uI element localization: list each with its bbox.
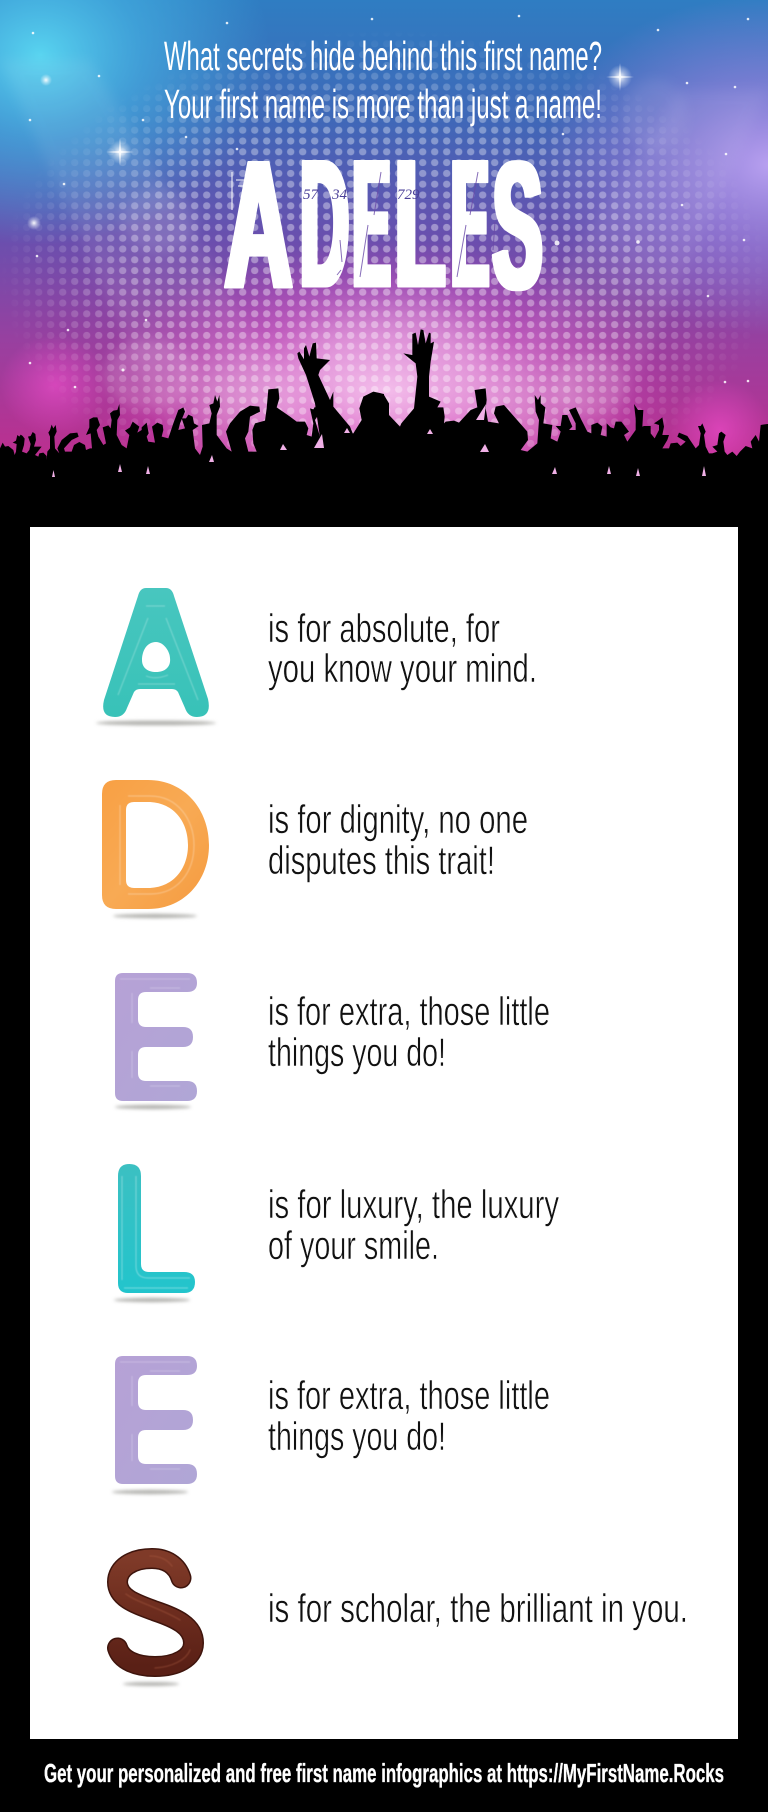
text: E second line: is for extra, those little	[268, 1374, 550, 1418]
crowd gaps	[52, 404, 706, 477]
row: letter L	[114, 1164, 559, 1302]
text: L line: is for luxury, the luxury	[268, 1183, 559, 1227]
white letters panel	[30, 527, 738, 1739]
name title: ADELES: L	[395, 123, 445, 325]
name title: ADELES: 729	[397, 187, 420, 203]
text: A line	[268, 607, 537, 691]
icon: glossy letter S	[118, 1556, 194, 1686]
name title: ADELES: E	[353, 124, 390, 325]
row: letter D	[102, 780, 528, 918]
text: E line	[268, 990, 550, 1075]
stars and sparkles	[27, 15, 749, 388]
text: E line: is for extra, those little	[268, 990, 550, 1034]
text: L line: of your smile.	[268, 1224, 439, 1268]
row: letter A	[96, 588, 537, 725]
icon: glossy letter E second	[112, 1356, 197, 1494]
row: letter E second	[112, 1356, 550, 1494]
name title: ADELES: S	[493, 126, 542, 327]
name title: ADELES: D	[300, 122, 349, 324]
name title: ADELES: 57	[303, 187, 320, 203]
crowd silhouette	[0, 329, 768, 528]
crowd: raised hand left	[297, 343, 353, 437]
headline text	[164, 33, 602, 127]
text: D line	[268, 798, 528, 883]
crowd: right half	[383, 329, 768, 480]
name title: ADELES	[225, 122, 542, 327]
icon: glossy letter E	[115, 973, 197, 1109]
name title: ADELES: 34	[331, 187, 348, 203]
text: L line	[268, 1183, 559, 1268]
text: A line: you know your mind.	[268, 647, 537, 691]
name title: ADELES: A	[225, 124, 292, 326]
crowd: left half	[0, 343, 384, 480]
text: D line: disputes this trait!	[268, 839, 495, 883]
row: letter S	[118, 1556, 688, 1686]
text: D line: is for dignity, no one	[268, 798, 528, 842]
icon: glossy letter D	[102, 780, 209, 918]
row: letter E	[115, 973, 550, 1109]
icon: glossy letter A	[96, 588, 216, 725]
text: E second line	[268, 1374, 550, 1459]
text: A line: is for absolute, for	[268, 607, 500, 651]
name title: ADELES: E	[451, 124, 489, 325]
text: E second line: things you do!	[268, 1415, 446, 1459]
text: E line: things you do!	[268, 1031, 446, 1075]
icon: glossy letter L	[114, 1164, 195, 1302]
header stage background	[0, 0, 768, 460]
dot matrix screen	[24, 42, 748, 452]
